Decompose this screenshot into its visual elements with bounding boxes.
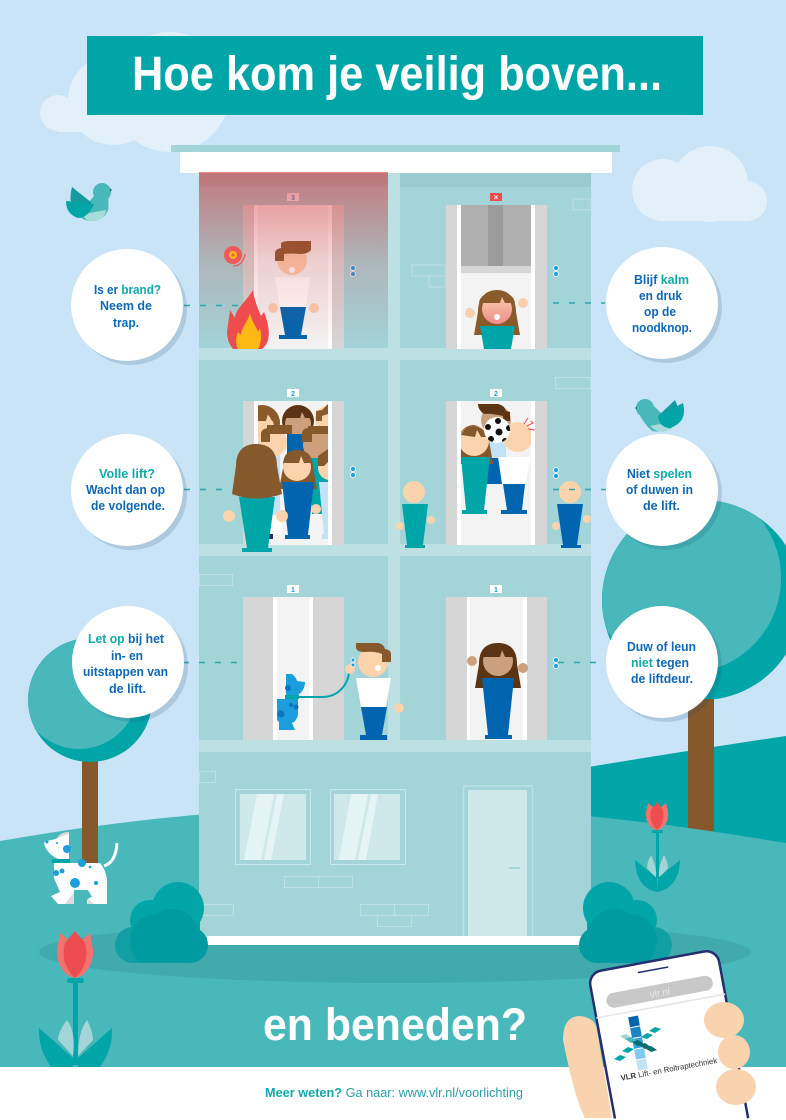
hand thumb xyxy=(563,1016,612,1118)
floors and column xyxy=(199,173,591,752)
ground shadow xyxy=(39,921,751,983)
elevator floor 3 left with man xyxy=(243,193,356,349)
callout: step in and out xyxy=(72,606,188,722)
back hill xyxy=(400,736,786,880)
icon: pain lines xyxy=(524,418,535,430)
bird left xyxy=(66,183,112,221)
man with leash xyxy=(345,643,404,740)
man in lift xyxy=(268,241,319,339)
cloud left xyxy=(40,32,230,152)
callout: step in and out: in- en xyxy=(111,648,143,663)
elevator floor 1 left with dog xyxy=(243,585,349,740)
icon: soccer ball xyxy=(484,417,510,443)
callout: stay calm xyxy=(606,247,722,363)
connector dashes xyxy=(183,303,606,662)
callout: full lift: de volgende. xyxy=(91,498,165,513)
bush right xyxy=(579,882,672,968)
callout: fire: Neem de xyxy=(100,298,152,313)
leash xyxy=(285,668,349,697)
white plinth xyxy=(207,936,583,945)
roof xyxy=(171,145,620,173)
tree right canopy xyxy=(602,501,786,700)
callout: step in and out: de lift. xyxy=(109,681,146,696)
closing heading: en beneden? xyxy=(263,999,527,1050)
elevator floor 1 left with dog: 1 xyxy=(291,587,295,594)
hand fingers xyxy=(704,1002,756,1105)
callout: do not lean: Duw of leun xyxy=(627,639,696,654)
windows xyxy=(236,790,406,864)
elevator floor 3 left with man: 3 xyxy=(291,195,295,202)
icon: fire xyxy=(227,290,269,349)
callout: fire xyxy=(71,249,187,365)
callout: do not lean: de liftdeur. xyxy=(631,671,693,686)
footer text: Meer weten? Ga naar: www.vlr.nl/voorlichting xyxy=(265,1085,523,1100)
blue dog in lift xyxy=(277,674,305,730)
elevator floor 1 right with woman: 1 xyxy=(494,587,498,594)
elevator floor 3 right with trapped woman: × xyxy=(494,193,499,202)
big tulip xyxy=(39,931,112,1068)
callout: no playing: Niet spelen xyxy=(627,466,692,481)
callout: stay calm: en druk xyxy=(639,288,683,303)
kids in lift xyxy=(459,404,533,514)
elevator floor 2 left crowded xyxy=(243,389,356,545)
callout: no playing: de lift. xyxy=(643,498,680,513)
callout: fire: trap. xyxy=(113,315,139,330)
callout: stay calm: noodknop. xyxy=(632,320,692,335)
elevator floor 2 left crowded: 2 xyxy=(291,391,295,398)
woman leaning xyxy=(467,643,528,739)
facade xyxy=(199,173,591,938)
trapped woman xyxy=(465,290,528,349)
elevator floor 1 right with woman xyxy=(446,585,558,740)
callout: do not lean xyxy=(606,606,722,722)
callout: fire: Is er brand? xyxy=(94,282,161,297)
door xyxy=(464,786,532,936)
wall bricks xyxy=(200,199,591,926)
person waiting blue xyxy=(552,481,591,548)
elevator floor 2 right playing kids xyxy=(446,389,558,545)
bush left xyxy=(115,882,208,968)
dalmatian dog xyxy=(44,832,117,904)
building xyxy=(171,145,620,945)
phone: VLR Lift- en Roltraptechniek xyxy=(620,1056,719,1083)
callout: step in and out: uitstappen van xyxy=(83,664,168,679)
callout: do not lean: niet tegen xyxy=(631,655,689,670)
crowd inside lift xyxy=(258,404,328,539)
title banner xyxy=(87,36,703,115)
phone: vlr.nl xyxy=(649,986,671,1001)
callout: no playing: of duwen in xyxy=(626,482,693,497)
callout: no playing xyxy=(606,434,722,550)
callout: full lift xyxy=(71,434,187,550)
callout: step in and out: Let op bij het xyxy=(88,631,165,646)
woman in blue xyxy=(279,450,321,539)
phone xyxy=(588,949,748,1120)
cloud right xyxy=(632,146,767,222)
elevator floor 2 right playing kids: 2 xyxy=(494,391,498,398)
alarm red glow xyxy=(199,172,388,349)
top shade band xyxy=(199,173,591,187)
title banner: Hoe kom je veilig boven... xyxy=(132,48,662,101)
bird right xyxy=(635,399,684,432)
small tulip xyxy=(635,802,680,892)
front hill xyxy=(0,806,786,1067)
callout: stay calm: op de xyxy=(644,304,676,319)
callout: stay calm: Blijf kalm xyxy=(634,272,689,287)
VLR logo xyxy=(614,1016,661,1070)
woman waiting with long hair xyxy=(223,444,288,552)
tree right trunk xyxy=(688,699,714,834)
person waiting teal xyxy=(396,481,435,548)
footer band xyxy=(0,1067,786,1120)
icon: alarm bell xyxy=(224,246,245,266)
tree left xyxy=(28,640,150,863)
elevator floor 3 right with trapped woman xyxy=(446,193,558,349)
callout: full lift: Wacht dan op xyxy=(86,482,165,497)
callout: full lift: Volle lift? xyxy=(99,466,155,481)
